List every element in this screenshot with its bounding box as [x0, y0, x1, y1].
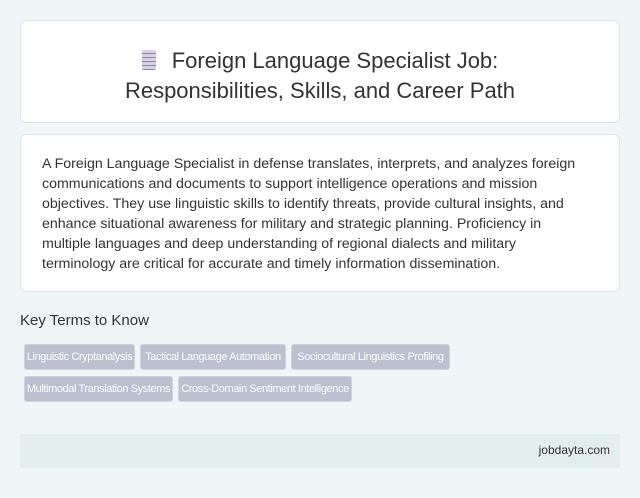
- tag: Cross-Domain Sentiment Intelligence: [181, 383, 349, 395]
- title: [125, 48, 515, 103]
- tag: [178, 376, 352, 402]
- footer text: jobdayta.com: [539, 443, 610, 457]
- title card: [20, 20, 620, 123]
- tag: [24, 376, 173, 402]
- description card: [20, 134, 620, 292]
- tag: [291, 344, 450, 370]
- title: Responsibilities, Skills, and Career Path: [125, 78, 515, 103]
- title: Foreign Language Specialist Job:: [172, 48, 498, 73]
- icon: document: [142, 50, 156, 70]
- tag: [140, 344, 286, 370]
- tag: [24, 344, 135, 370]
- tag: Multimodal Translation Systems: [27, 383, 170, 395]
- description text: A Foreign Language Specialist in defense translates, interprets, and analyzes foreign communications and documents to support intelligence operations and mission objectives. They use linguistic skills to identify threats, provide cultural insights, and enhance situational awareness for military and strategic planning. Proficiency in multiple languages and deep understanding of regional dialects and military terminology are critical for accurate and timely information dissemination.: [42, 156, 575, 272]
- heading: key terms: Key Terms to Know: [20, 312, 149, 329]
- footer: [20, 434, 620, 468]
- tag: Linguistic Cryptanalysis: [27, 351, 132, 363]
- tag: Tactical Language Automation: [145, 351, 281, 363]
- tag: Sociocultural Linguistics Profiling: [297, 351, 444, 363]
